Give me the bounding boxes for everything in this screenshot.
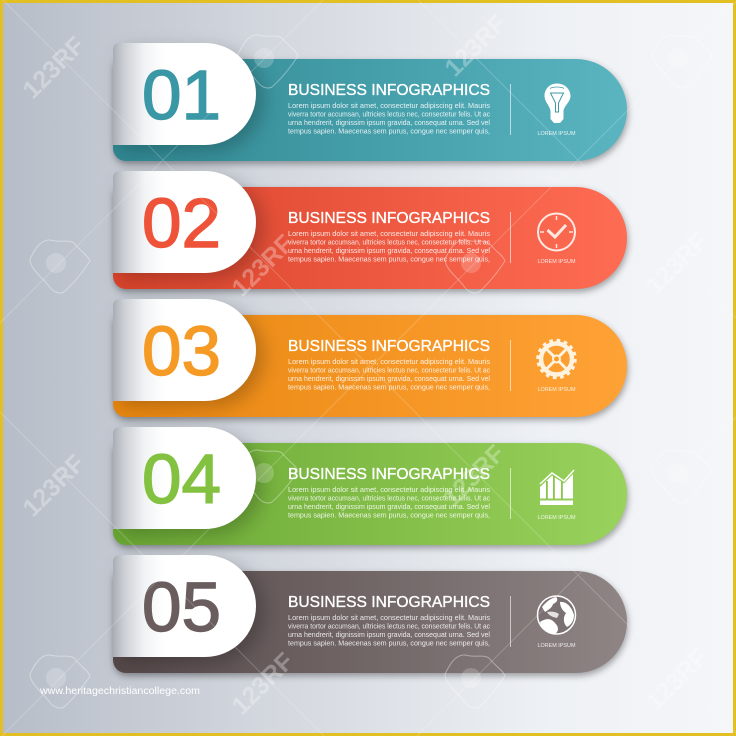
panel: row 04 green — [113, 427, 628, 548]
body text: tempus sapien. Maecenas sem purus, congue nec semper quis, — [288, 382, 490, 392]
body text: urna hendrerit, dignissim ipsum gravida, consequat urna. Sed vel — [288, 374, 490, 383]
body text: viverra tortor accumsan, ultricies lectus nec, consectetur felis. Ut ac — [288, 110, 490, 118]
body text: viverra tortor accumsan, ultricies lectus nec, consectetur felis. Ut ac — [288, 366, 490, 374]
heading: BUSINESS INFOGRAPHICS — [288, 466, 490, 483]
body text — [288, 485, 490, 520]
icon label: LOREM IPSUM — [538, 387, 576, 393]
panel: row 02 red — [113, 171, 628, 292]
watermark stamps: 123RF — [17, 31, 90, 104]
panel: row 01 teal — [113, 43, 628, 164]
body text: tempus sapien. Maecenas sem purus, congue nec semper quis, — [288, 510, 490, 520]
body text: viverra tortor accumsan, ultricies lectus nec, consectetur felis. Ut ac — [288, 494, 490, 502]
icon: globe — [538, 596, 576, 634]
watermark stamps: 123RF — [17, 449, 90, 522]
number 05: 05 — [142, 568, 221, 646]
body text: Lorem ipsum dolor sit amet, consectetur adipiscing elit. Mauris — [288, 485, 490, 494]
heading: BUSINESS INFOGRAPHICS — [288, 338, 490, 355]
body text: tempus sapien. Maecenas sem purus, congue nec semper quis, — [288, 254, 490, 264]
watermark stamps: 123RF — [226, 647, 299, 720]
watermark stamps: 123RF — [437, 439, 510, 512]
body text: urna hendrerit, dignissim ipsum gravida, consequat urna. Sed vel — [288, 118, 490, 127]
body text: viverra tortor accumsan, ultricies lectus nec, consectetur felis. Ut ac — [288, 622, 490, 630]
body text: Lorem ipsum dolor sit amet, consectetur adipiscing elit. Mauris — [288, 357, 490, 366]
icon: bar chart — [540, 470, 574, 505]
body text — [288, 613, 490, 648]
heading: BUSINESS INFOGRAPHICS — [288, 594, 490, 611]
icon: light bulb — [544, 84, 570, 123]
body text: urna hendrerit, dignissim ipsum gravida, consequat urna. Sed vel — [288, 246, 490, 255]
body text — [288, 357, 490, 392]
number 03: 03 — [142, 312, 221, 390]
body text — [288, 101, 490, 136]
body text: urna hendrerit, dignissim ipsum gravida, consequat urna. Sed vel — [288, 502, 490, 511]
icon label: LOREM IPSUM — [538, 643, 576, 649]
number 04: 04 — [142, 440, 221, 518]
heading: BUSINESS INFOGRAPHICS — [288, 82, 490, 99]
source caption: www.heritagechristiancollege.com — [39, 686, 200, 697]
icon: gear — [538, 340, 575, 378]
body text: tempus sapien. Maecenas sem purus, congue nec semper quis, — [288, 638, 490, 648]
body text: Lorem ipsum dolor sit amet, consectetur adipiscing elit. Mauris — [288, 101, 490, 110]
watermark stamps: 123RF — [640, 227, 713, 300]
body text: Lorem ipsum dolor sit amet, consectetur adipiscing elit. Mauris — [288, 613, 490, 622]
icon: clock — [538, 214, 575, 250]
watermark stamps: 123RF — [439, 9, 512, 82]
body text: Lorem ipsum dolor sit amet, consectetur adipiscing elit. Mauris — [288, 229, 490, 238]
number 01: 01 — [142, 56, 221, 134]
body text: urna hendrerit, dignissim ipsum gravida, consequat urna. Sed vel — [288, 630, 490, 639]
body text: tempus sapien. Maecenas sem purus, congue nec semper quis, — [288, 126, 490, 136]
icon label: LOREM IPSUM — [538, 259, 576, 265]
heading: BUSINESS INFOGRAPHICS — [288, 210, 490, 227]
watermark stamps: 123RF — [640, 643, 713, 716]
body text: viverra tortor accumsan, ultricies lectus nec, consectetur felis. Ut ac — [288, 238, 490, 246]
panel: row 03 orange — [113, 299, 628, 420]
watermark stamps: 123RF — [226, 229, 299, 302]
body text — [288, 229, 490, 264]
icon label: LOREM IPSUM — [538, 131, 576, 137]
panel: row 05 brown — [113, 555, 628, 676]
number 02: 02 — [142, 184, 221, 262]
icon label: LOREM IPSUM — [538, 515, 576, 521]
